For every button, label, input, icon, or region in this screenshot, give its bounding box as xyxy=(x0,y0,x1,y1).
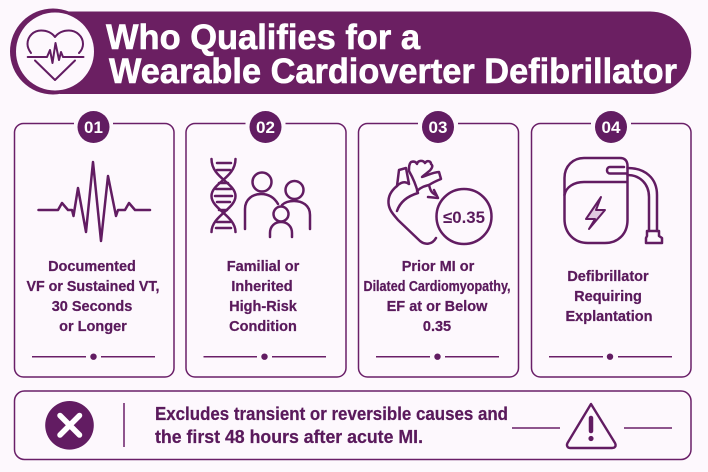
card 03 text xyxy=(364,259,510,335)
exclusion text: Excludes transient or reversible causes and xyxy=(155,403,508,424)
divider 02 xyxy=(204,354,326,360)
card 04 text: Defibrillator xyxy=(567,269,649,285)
panel: exclusion callout xyxy=(14,391,691,460)
card 01 text: Documented xyxy=(48,259,136,275)
separator xyxy=(123,403,125,447)
title text: Who Qualifies for a xyxy=(106,18,421,57)
badge 03: 03 xyxy=(429,118,447,137)
badge 04 xyxy=(595,111,627,143)
badge 01 xyxy=(78,111,110,143)
card 03 text: EF at or Below xyxy=(387,299,488,315)
card 01 text: 30 Seconds xyxy=(52,299,132,315)
card 01 text: VF or Sustained VT, xyxy=(26,279,160,295)
icon: heart with EF value: ≤0.35 xyxy=(443,208,485,227)
icon: X in circle xyxy=(45,401,94,450)
card 02 text: High-Risk xyxy=(229,299,298,315)
divider 03 xyxy=(376,354,499,360)
badge 03 xyxy=(422,111,454,143)
badge 02 xyxy=(250,111,282,143)
card 02 text: Inherited xyxy=(231,279,293,295)
card 03 text: 0.35 xyxy=(423,319,451,335)
icon: warning triangle with lines xyxy=(512,404,672,448)
title banner xyxy=(10,8,691,94)
panel: card 04 xyxy=(532,111,691,377)
panel: card 01 xyxy=(14,111,174,377)
badge 02: 02 xyxy=(256,118,275,137)
icon: DNA helix and family xyxy=(212,159,310,237)
card 01 text: or Longer xyxy=(59,319,127,335)
icon: arrhythmia waveform xyxy=(38,162,150,241)
card 02 text: Familial or xyxy=(227,259,300,275)
card 03 text: Prior MI or xyxy=(402,259,475,275)
badge 01: 01 xyxy=(84,118,103,137)
card 04 text: Requiring xyxy=(574,289,642,305)
panel: card 03 xyxy=(358,111,518,377)
panel: card 02 xyxy=(186,111,346,377)
exclusion text: the first 48 hours after acute MI. xyxy=(155,426,423,447)
divider 01 xyxy=(32,354,155,360)
badge 04: 04 xyxy=(602,118,621,137)
icon: heart with pulse xyxy=(28,30,84,80)
title text xyxy=(106,18,677,91)
card 03 text: Dilated Cardiomyopathy, xyxy=(364,279,510,295)
card 02 text xyxy=(227,259,300,335)
icon: heart with EF value xyxy=(388,161,492,244)
card 04 text xyxy=(565,269,653,325)
card 04 text: Explantation xyxy=(565,309,653,325)
card 02 text: Condition xyxy=(229,319,297,335)
exclusion text xyxy=(155,403,508,447)
divider 04 xyxy=(549,354,672,360)
title text: Wearable Cardioverter Defibrillator xyxy=(109,52,677,91)
icon: implantable defibrillator xyxy=(564,158,662,243)
card 01 text xyxy=(26,259,160,335)
